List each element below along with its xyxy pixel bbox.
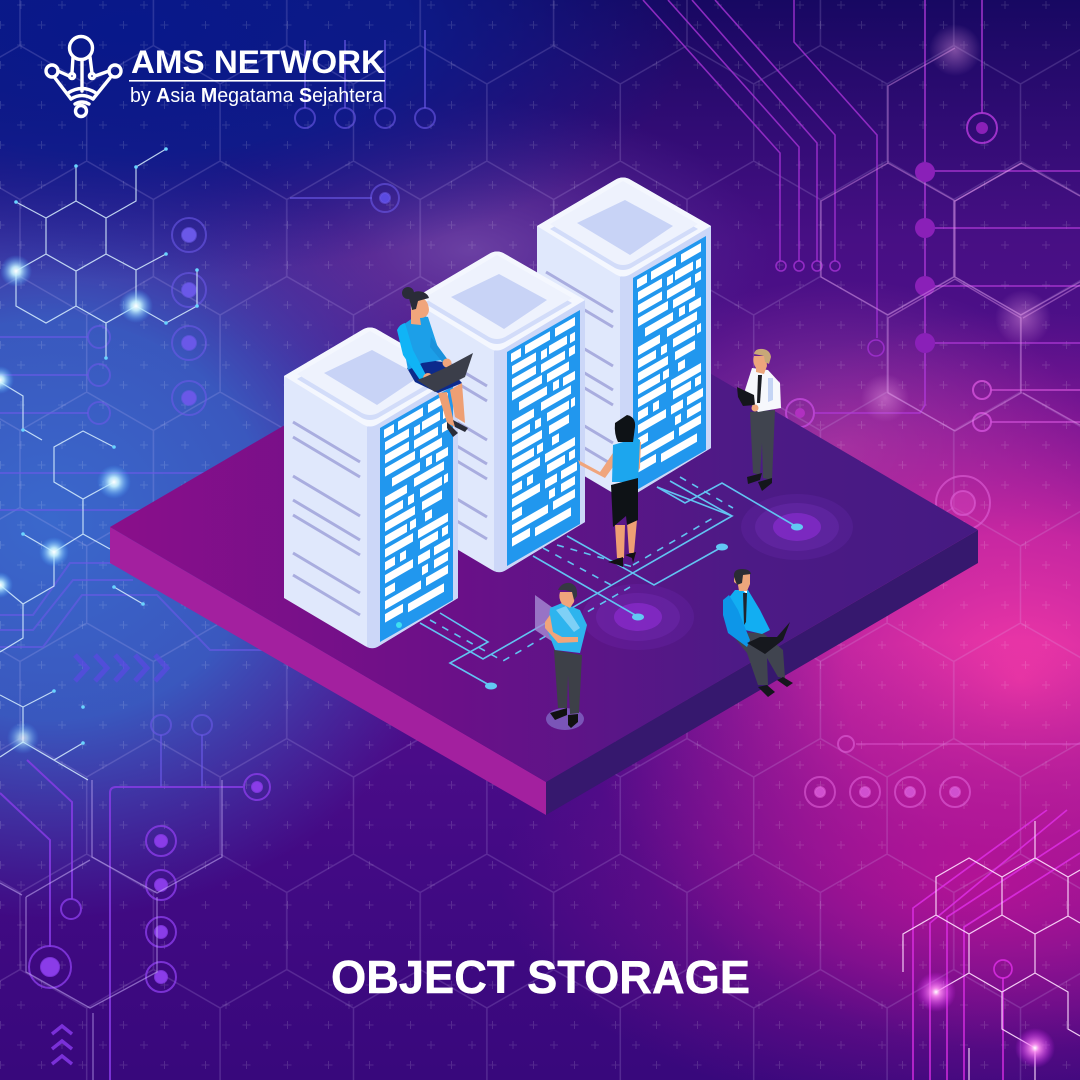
person: seated man with laptop [723,569,793,697]
top right circuit lines [643,0,1080,431]
bottom left circuit [0,760,270,1080]
person: standing woman [578,415,641,567]
chevrons bottom left [52,1026,72,1064]
bottom right molecule network [903,821,1080,1080]
logo tagline: by Asia Megatama Sejahtera [130,85,384,107]
soft glows on hexagon corners [861,24,1051,422]
bright hexagon outlines right [821,48,1080,431]
person: man with hologram screen [535,583,587,730]
left side circle nodes and circuit lines [0,30,435,787]
glowing nodes left [0,255,153,754]
bright hexagon outlines left [0,780,222,1080]
chevrons left [75,655,167,681]
logo name: AMS NETWORK [131,44,386,80]
server rack middle [411,252,585,572]
isometric platform [110,275,978,815]
glow: circuit end points [582,494,853,650]
person: man with tablet [737,349,781,491]
logo: AMS Network [46,36,386,116]
person: seated woman with laptop [397,287,473,437]
circuit traces on platform [420,477,803,690]
title: OBJECT STORAGE [331,951,750,1003]
glowing nodes bottom right [916,972,1055,1068]
molecule node dots [14,147,199,745]
bottom right magenta circuit [913,810,1080,1080]
left molecule network [0,149,197,780]
logo rule [129,80,385,82]
right side circle nodes [805,476,1080,807]
server rack front [284,328,458,648]
icon: crown network logo [46,36,121,116]
server rack back [537,178,711,498]
